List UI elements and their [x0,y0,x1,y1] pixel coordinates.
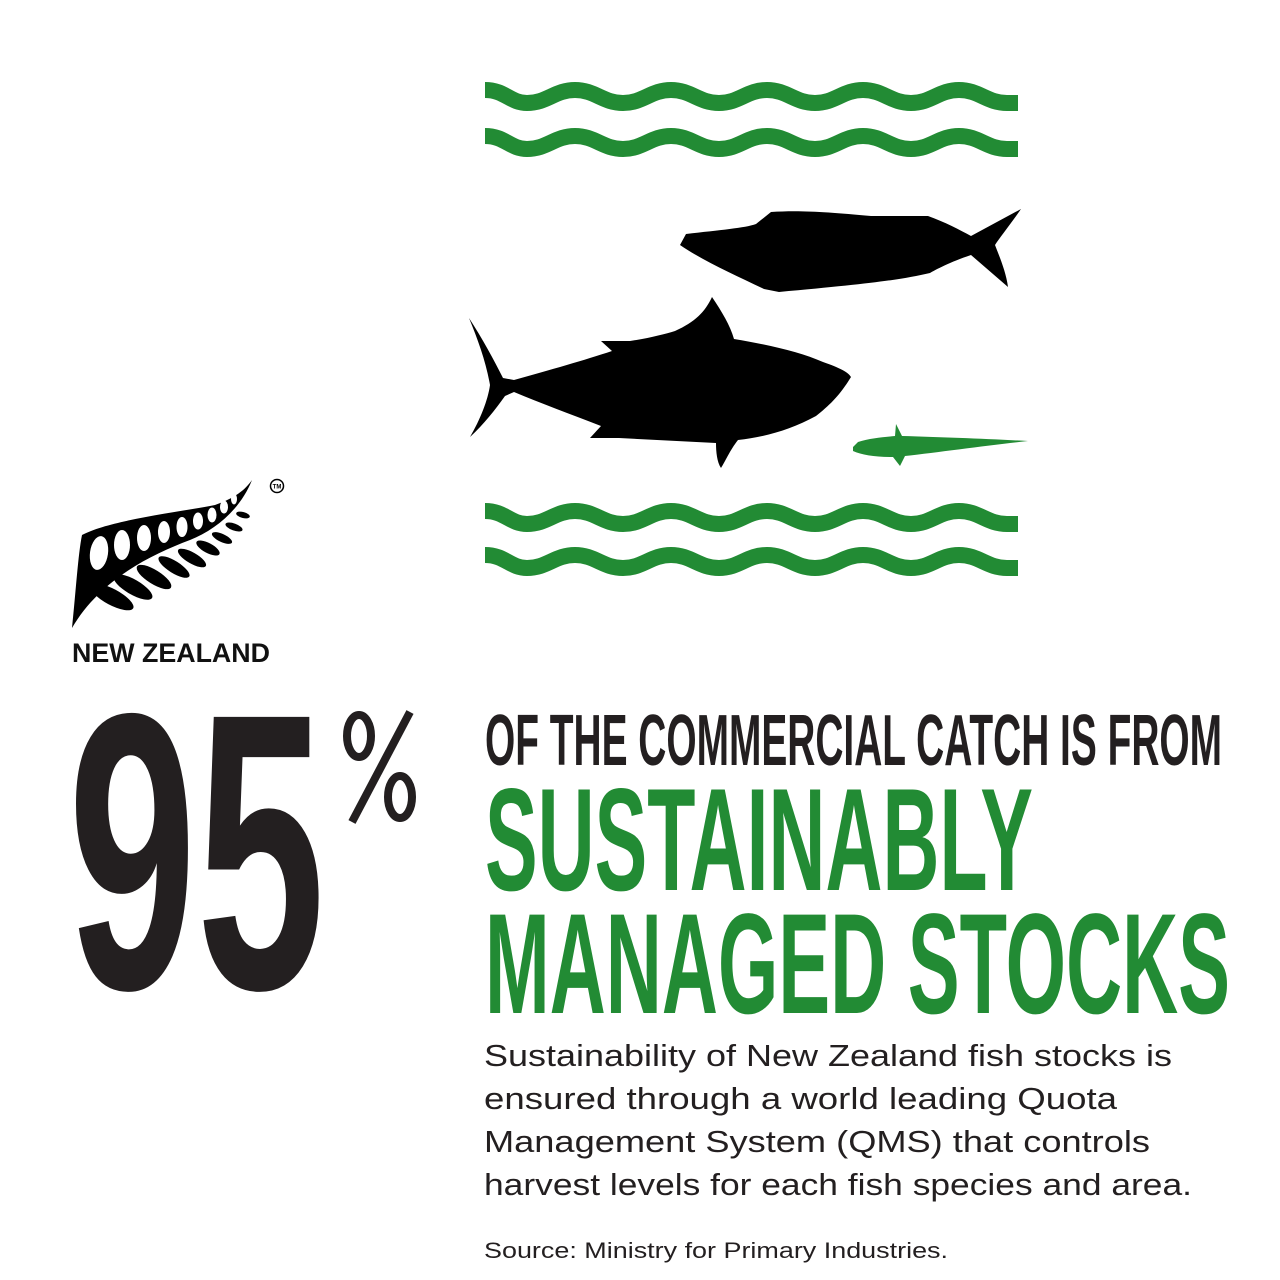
waves: bottom [485,511,1018,568]
fish: tuna [469,297,851,468]
body paragraph: ensured through a world leading Quota [484,1081,1118,1116]
waves: top [485,90,1018,149]
body paragraph: harvest levels for each fish species and area. [484,1167,1192,1202]
body paragraph: Sustainability of New Zealand fish stocks is [484,1038,1172,1073]
logo: silver fern [72,480,284,628]
body paragraph [484,1038,1192,1202]
body paragraph: Management System (QMS) that controls [484,1124,1150,1159]
logo: silver fern: TM [273,484,281,490]
source note: Source: Ministry for Primary Industries. [484,1238,948,1263]
logo text: NEW ZEALAND: NEW ZEALAND [72,638,270,668]
big number: 95: 95 [68,632,325,1072]
fish: small green [853,424,1028,466]
percent sign [347,712,412,822]
fish: mackerel [680,209,1021,292]
